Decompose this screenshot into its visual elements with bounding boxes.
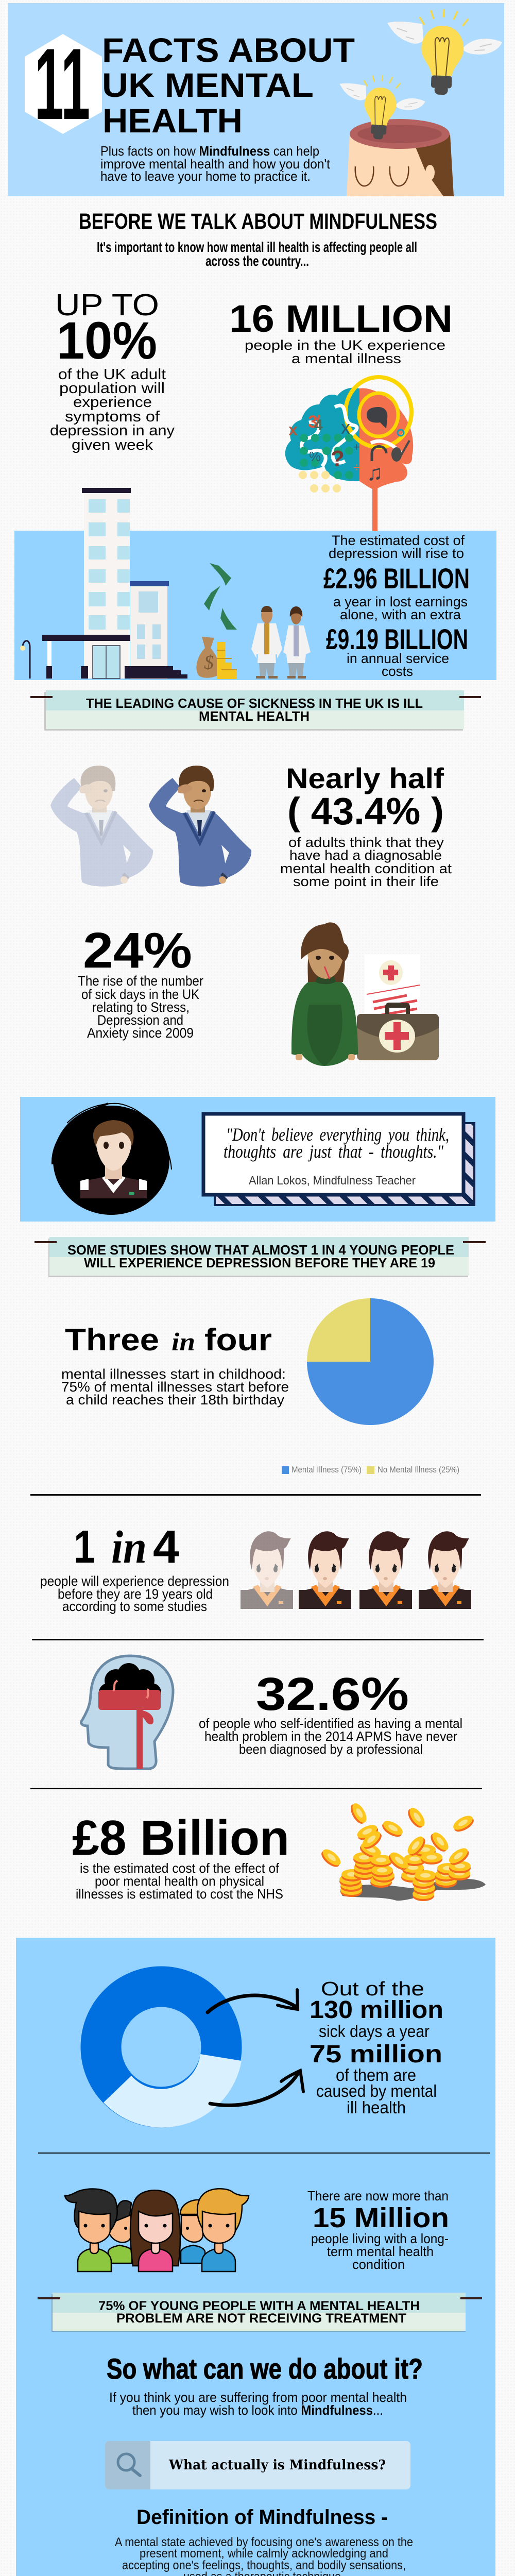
arrow: bottom — [210, 2071, 303, 2105]
stat: three in four: mental illnesses start in childhood: — [61, 1366, 286, 1382]
legend — [282, 1465, 459, 1475]
stat: 130 million sick days: sick days a year — [319, 2022, 430, 2041]
stat: 8 billion: is the estimated cost of the effect of — [80, 1860, 280, 1876]
stat: 130 million sick days — [310, 1978, 443, 2117]
stat: 15 million: term mental health — [327, 2244, 434, 2259]
stat: up to 10 percent: symptoms of — [65, 409, 160, 425]
banner: 75 percent of young people — [38, 2293, 482, 2332]
stat: 32.6 percent: of people who self-identified as having a mental — [199, 1716, 462, 1731]
icon: white hexagon with number 11 — [25, 27, 102, 141]
stat: 24 percent: Depression and — [97, 1012, 183, 1028]
cost text: depression will rise to — [329, 546, 464, 561]
stat: 32.6 percent: 32.6% — [256, 1669, 409, 1720]
icon: money and coins — [196, 563, 237, 679]
heading: so what can we do: So what can we do about it? — [107, 2352, 423, 2385]
title: UK MENTAL — [102, 66, 314, 104]
arrow: top — [208, 1990, 298, 2012]
heading: before we talk about mindfulness: across the country... — [205, 253, 309, 269]
banner: 1 in 4 young people — [35, 1237, 486, 1277]
subtitle: have to leave your home to practice it. — [100, 168, 311, 184]
stat: 1 in 4: according to some studies — [62, 1599, 207, 1614]
icon: colourful brain tree: ♫ — [367, 461, 383, 485]
stat: 8 billion: poor mental health on physical — [95, 1873, 264, 1889]
stat: 32.6 percent: been diagnosed by a professional — [239, 1741, 423, 1757]
stat: 130 million sick days: ill health — [347, 2098, 406, 2117]
legend: No Mental Illness (25%) — [377, 1465, 459, 1475]
icon: head with storm cloud — [81, 1656, 173, 1769]
stat: nearly half: some point in their life — [293, 874, 439, 889]
stat: 1 in 4: 4 — [153, 1521, 179, 1573]
icon: sick woman with medical kit — [291, 922, 439, 1066]
stat: three in four — [61, 1323, 289, 1408]
stat: three in four: 75% of mental illnesses start before — [61, 1379, 289, 1395]
stat: nearly half: of adults think that they — [288, 835, 444, 850]
icon: four people, one faded — [241, 1531, 471, 1609]
icon: doctors — [251, 606, 311, 679]
stat: 24 percent — [78, 922, 203, 1041]
stat: 15 million: condition — [352, 2257, 405, 2272]
title: HEALTH — [102, 101, 243, 140]
banner: leading cause of sickness — [30, 690, 481, 731]
panel: big blue section — [16, 1938, 495, 2576]
cost text: £2.96 BILLION — [323, 562, 470, 595]
stat: up to 10 percent: population will — [59, 380, 165, 397]
stat: 15 million: There are now more than — [307, 2188, 449, 2204]
ghost figure — [50, 766, 153, 887]
stat: 16 million: a mental illness — [291, 351, 401, 366]
stat: 24 percent: 24% — [83, 922, 192, 978]
stat: 130 million sick days: caused by mental — [316, 2081, 437, 2100]
icon: colourful brain tree: x — [341, 417, 350, 438]
intro text: then you may wish to look into Mindfulness... — [132, 2402, 383, 2418]
banner: 1 in 4 young people: WILL EXPERIENCE DEPRESSION BEFORE THEY ARE 19 — [84, 1255, 435, 1270]
pie chart — [282, 1298, 459, 1475]
banner: 75 percent of young people: PROBLEM ARE NOT RECEIVING TREATMENT — [116, 2311, 406, 2326]
stat: 24 percent: relating to Stress, — [92, 999, 190, 1015]
stat: up to 10 percent: given week — [72, 437, 153, 453]
title: FACTS ABOUT — [102, 31, 355, 69]
definition — [115, 2506, 413, 2576]
donut chart — [101, 1987, 242, 2127]
stat: 130 million sick days: 130 million — [310, 1996, 443, 2024]
subtitle: improve mental health and how you don't — [100, 156, 331, 172]
stat: 1 in 4 — [40, 1521, 229, 1614]
banner: leading cause of sickness: MENTAL HEALTH — [199, 708, 310, 724]
stat: 32.6 percent: health problem in the 2014 APMS have never — [204, 1728, 457, 1744]
heading: before we talk about mindfulness: BEFORE WE TALK ABOUT MINDFULNESS — [79, 209, 437, 234]
stat: 1 in 4: before they are 19 years old — [58, 1586, 213, 1602]
legend: Mental Illness (75%) — [291, 1465, 362, 1475]
quote card — [203, 1114, 474, 1205]
stat: 32.6 percent — [199, 1669, 462, 1757]
cost text: a year in lost earnings — [333, 594, 468, 609]
stat: up to 10 percent: 10% — [57, 311, 157, 370]
intro text: If you think you are suffering from poor mental health — [109, 2389, 407, 2405]
stat: 1 in 4: people will experience depression — [40, 1573, 229, 1589]
stat: 130 million sick days: of them are — [336, 2065, 416, 2084]
icon: open head with flying light bulbs — [336, 8, 503, 196]
panel: quote Allan Lokos — [20, 1097, 495, 1222]
stat: three in four: Three — [65, 1323, 159, 1357]
stat: 130 million sick days: Out of the — [321, 1978, 424, 2000]
icon: group of people — [65, 2189, 249, 2272]
panel: cost of depression — [14, 531, 496, 680]
stat: 24 percent: Anxiety since 2009 — [87, 1025, 194, 1041]
banner: leading cause of sickness: THE LEADING CAUSE OF SICKNESS IN THE UK IS ILL — [86, 696, 423, 711]
stat: 15 million: 15 Million — [313, 2202, 449, 2233]
stat: 24 percent: of sick days in the UK — [81, 987, 199, 1002]
panel: hero header — [8, 3, 504, 196]
stat: 8 billion: £8 Billion — [72, 1810, 289, 1866]
icon: colourful brain tree: 4 — [314, 417, 323, 434]
icon: stressed man with ghost — [50, 766, 251, 887]
stat: up to 10 percent: depression in any — [50, 422, 175, 439]
stat: 16 million — [229, 297, 453, 366]
definition: Definition of Mindfulness - — [136, 2506, 388, 2529]
stat: 8 billion — [72, 1810, 289, 1902]
stat: up to 10 percent: UP TO — [55, 288, 159, 322]
stat: nearly half: have had a diagnosable — [289, 848, 442, 863]
stat: three in four: four — [204, 1323, 272, 1357]
cost text: costs — [382, 664, 413, 679]
definition: accepting one's feelings, thoughts, and bodily sensations, — [122, 2558, 406, 2572]
stat: nearly half: ( 43.4% ) — [287, 790, 444, 833]
cost text: The estimated cost of — [332, 533, 465, 548]
icon: colourful brain tree: + — [353, 440, 360, 453]
icon: white hexagon with number 11: 11 — [35, 27, 90, 141]
icon: colourful brain tree: 3/ — [308, 412, 321, 432]
stat: 130 million sick days: 75 million — [310, 2041, 442, 2068]
stat: 24 percent: The rise of the number — [78, 973, 203, 989]
icon: pile of coins — [319, 1801, 486, 1901]
stat: 1 in 4: in — [111, 1522, 147, 1573]
icon: colourful brain tree: % — [309, 449, 321, 464]
banner: 1 in 4 young people: SOME STUDIES SHOW THAT ALMOST 1 IN 4 YOUNG PEOPLE — [67, 1242, 454, 1258]
stat: up to 10 percent: of the UK adult — [58, 366, 166, 383]
cost text: alone, with an extra — [340, 607, 461, 622]
search bar — [105, 2441, 410, 2489]
portrait — [53, 1104, 171, 1215]
stat: nearly half — [280, 762, 452, 889]
definition: A mental state achieved by focusing one's awareness on the — [115, 2535, 413, 2549]
stat: 15 million: people living with a long- — [311, 2231, 449, 2246]
quote card: thoughts are just that - thoughts." — [224, 1141, 444, 1162]
stat: up to 10 percent: experience — [73, 394, 152, 411]
subtitle: Plus facts on how Mindfulness can help — [100, 143, 319, 159]
stat: 1 in 4: 1 — [74, 1521, 95, 1573]
stat: up to 10 percent — [50, 288, 175, 453]
stat: 16 million: people in the UK experience — [245, 337, 445, 353]
title — [102, 31, 355, 140]
stat: three in four: a child reaches their 18th birthday — [66, 1392, 285, 1408]
stat: 15 million — [307, 2188, 449, 2272]
intro text — [109, 2389, 407, 2418]
quote card: "Don't believe everything you think, — [226, 1124, 449, 1145]
subtitle — [100, 143, 331, 184]
icon: magnifier — [118, 2454, 140, 2476]
definition: present moment, while calmly acknowledging and — [140, 2547, 388, 2561]
icon: money and coins: $ — [204, 652, 214, 673]
search bar: What actually is Mindfulness? — [168, 2458, 386, 2473]
stat: three in four: in — [171, 1327, 195, 1356]
stat: nearly half: mental health condition at — [280, 861, 452, 876]
heading: before we talk about mindfulness — [79, 209, 437, 269]
cost text — [323, 533, 470, 679]
cost text: in annual service — [347, 651, 449, 666]
icon: hospital building — [20, 488, 187, 679]
icon: colourful brain tree — [285, 377, 413, 531]
quote card: Allan Lokos, Mindfulness Teacher — [249, 1174, 416, 1187]
stat: 8 billion: illnesses is estimated to cost the NHS — [76, 1886, 283, 1902]
icon: colourful brain tree: ? — [331, 446, 345, 471]
icon: colourful brain tree: ÷ — [353, 461, 360, 474]
stat: 16 million: 16 MILLION — [229, 297, 453, 340]
stat: nearly half: Nearly half — [286, 762, 444, 794]
banner: 75 percent of young people: 75% OF YOUNG PEOPLE WITH A MENTAL HEALTH — [98, 2299, 420, 2313]
icon: colourful brain tree: x — [288, 420, 298, 439]
